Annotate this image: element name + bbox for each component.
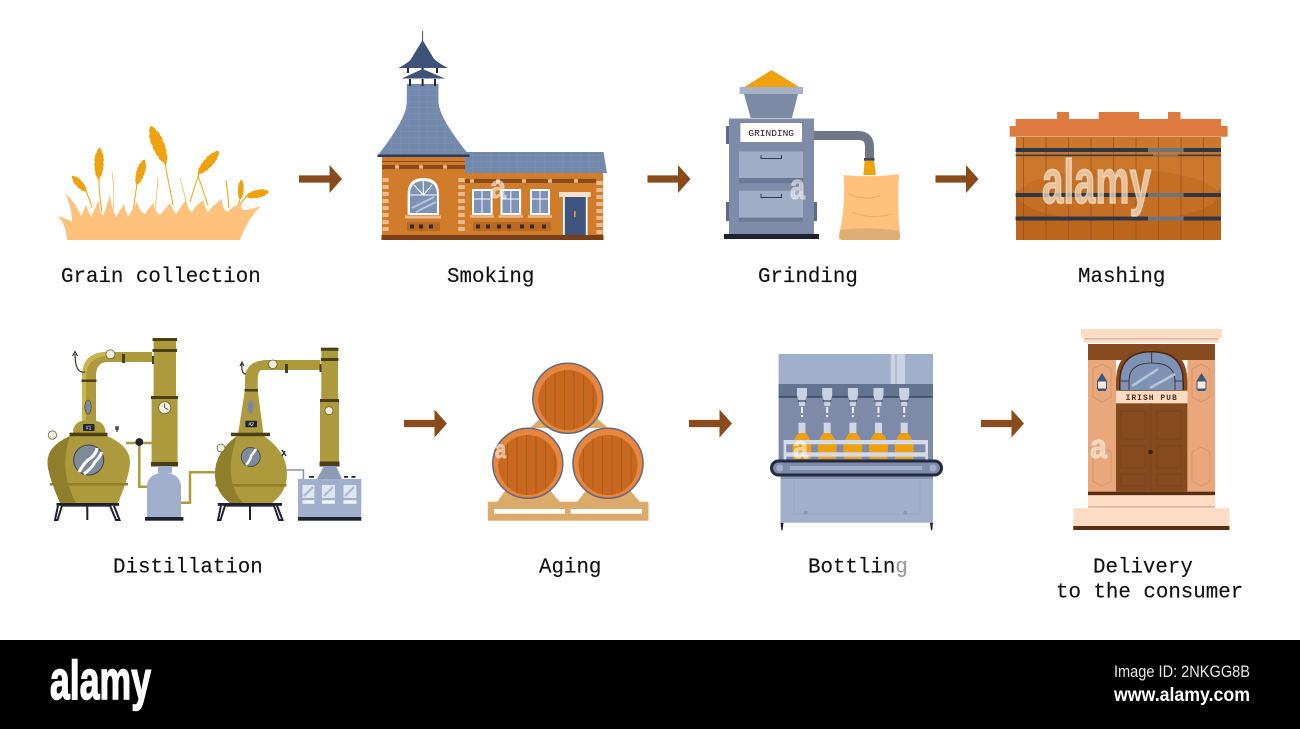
top barrel <box>533 363 603 433</box>
receiver <box>145 466 183 521</box>
watermark: alamy <box>1042 148 1151 217</box>
right support <box>577 488 640 502</box>
machine base <box>780 474 933 530</box>
icon: smoking malt house <box>378 31 607 240</box>
column one <box>151 338 178 466</box>
logo: alamy <box>50 649 151 711</box>
label: mashing: Mashing <box>1078 266 1165 289</box>
mill body <box>724 118 819 239</box>
label: delivery to the consumer: Delivery <box>1093 556 1193 580</box>
tower roof <box>378 84 469 155</box>
door <box>1116 403 1187 492</box>
wing roof <box>465 152 607 173</box>
machine back <box>779 354 933 384</box>
label plate <box>740 123 802 142</box>
grass tuft <box>58 193 261 240</box>
bottles <box>792 423 914 459</box>
label: grinding: Grinding <box>758 266 858 289</box>
lanterns <box>1097 373 1206 391</box>
bottle rails <box>784 440 928 460</box>
wall panels <box>1093 364 1210 486</box>
icon: grain field <box>58 124 270 240</box>
door <box>559 192 591 235</box>
grain pile <box>744 70 800 88</box>
brick bands <box>382 161 596 183</box>
arrow <box>404 410 447 438</box>
icon: stacked barrels <box>488 363 648 521</box>
wheat stems <box>86 163 246 218</box>
icon: mash tun <box>1010 112 1228 240</box>
watermark: a <box>790 166 806 207</box>
pub sign: IRISH PUB <box>1126 394 1178 403</box>
ball valve <box>135 438 143 446</box>
watermark: a <box>495 434 506 464</box>
arched window <box>405 178 441 218</box>
watermark: a <box>1090 428 1108 466</box>
tower wall <box>382 157 465 236</box>
wheat ears <box>69 124 270 201</box>
wing windows <box>470 189 552 216</box>
filling nozzles <box>797 388 909 418</box>
arrow <box>299 165 342 193</box>
connecting pipes <box>126 443 216 503</box>
still two: #2 <box>248 422 254 428</box>
condenser <box>286 466 361 521</box>
pub sign <box>1116 391 1187 403</box>
label: distillation: Distillation <box>113 556 263 580</box>
icon: bottling line <box>772 354 942 530</box>
conveyor <box>772 461 942 475</box>
label plate: GRINDING <box>748 128 794 139</box>
arched window <box>1116 347 1187 391</box>
icon: grinding mill <box>724 70 900 240</box>
upper support <box>530 414 608 428</box>
image id: Image ID: 2NKGG8B <box>1114 662 1250 681</box>
lid <box>1010 112 1228 137</box>
wall vents <box>407 222 551 231</box>
grain sack <box>839 174 900 240</box>
website: www.alamy.com <box>1113 685 1250 706</box>
right barrel <box>573 428 643 498</box>
arrow <box>689 410 732 438</box>
arrow <box>936 165 978 193</box>
tub <box>1016 137 1221 240</box>
facade <box>1088 344 1215 360</box>
column two <box>320 348 340 466</box>
label: delivery to the consumer: to the consumer <box>1056 582 1243 604</box>
footer bar <box>0 640 1300 729</box>
still two <box>215 360 320 520</box>
label: smoking: Smoking <box>447 266 534 289</box>
label: aging: Aging <box>539 556 601 580</box>
pallet <box>488 502 648 521</box>
label: grain collection: Grain collection <box>61 266 261 289</box>
foundation <box>382 235 604 240</box>
still one <box>48 350 152 520</box>
left barrel <box>493 428 563 498</box>
arrow <box>648 165 690 193</box>
wing wall <box>465 173 603 236</box>
pipe <box>814 136 870 159</box>
icon: irish pub <box>1073 329 1230 530</box>
watermark: a <box>490 169 506 205</box>
icon: copper stills <box>48 338 361 521</box>
hoops <box>1016 148 1221 220</box>
arrow <box>981 410 1024 438</box>
hopper <box>744 94 798 118</box>
cupola <box>398 31 448 86</box>
label: bottling: Bottling <box>808 556 908 580</box>
left support <box>497 488 560 502</box>
grain chute <box>863 161 876 175</box>
steps <box>1073 492 1230 530</box>
watermark: a <box>793 429 808 465</box>
cornice <box>1081 329 1222 338</box>
still one: #1 <box>86 426 92 432</box>
